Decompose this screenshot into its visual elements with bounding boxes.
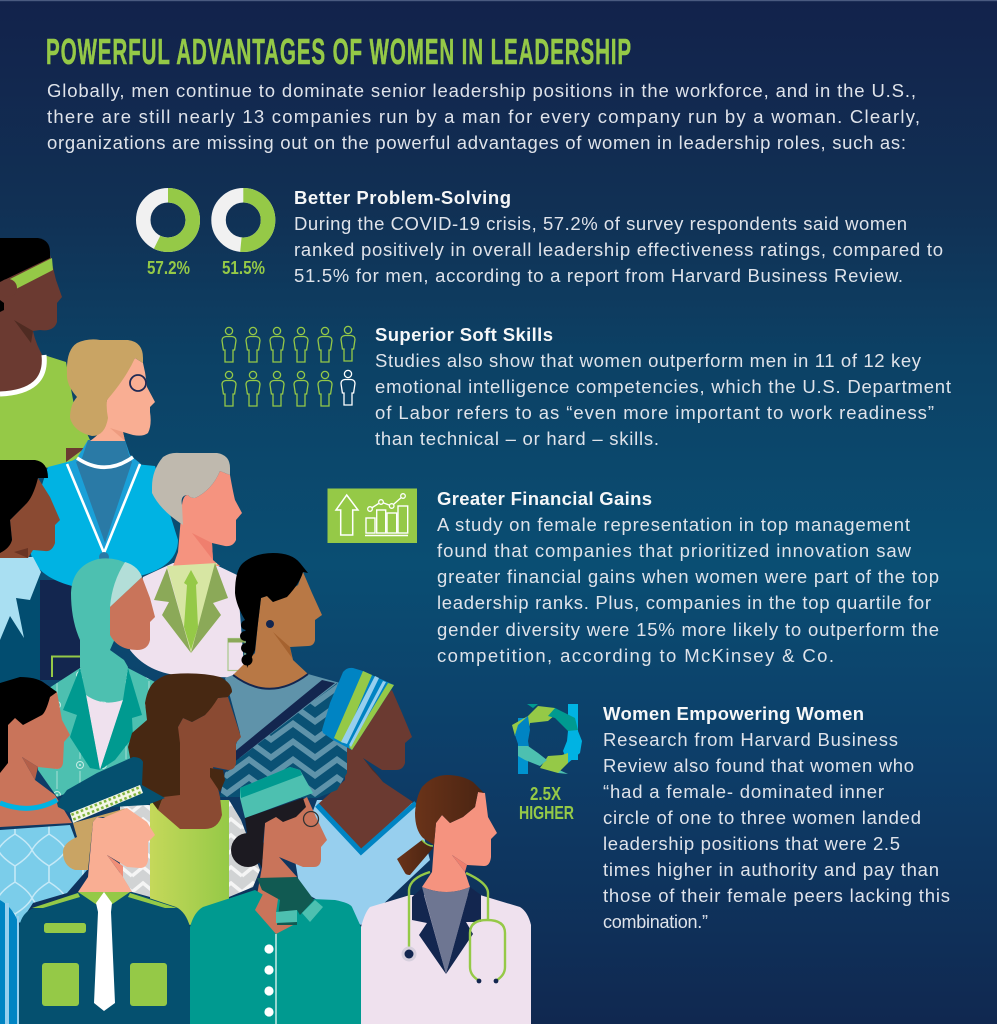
section: superior soft skills: of Labor refers to as “even more important to work readiness” — [375, 402, 934, 423]
figure: woman with black hair and blue necklace — [0, 677, 87, 1024]
figure: woman in teal hat and scarf — [190, 767, 361, 1024]
section: greater financial gains — [437, 488, 939, 666]
icon: donut charts 57.2% and 51.5% — [143, 195, 268, 278]
illustration: group of women — [0, 238, 531, 1024]
figure: blonde woman with glasses and lanyard — [30, 339, 178, 586]
section: greater financial gains: leadership ranks. Plus, companies in the top quartile for — [437, 592, 931, 613]
figure: woman pilot with cap — [19, 757, 190, 1024]
intro text: there are still nearly 13 companies run by a man for every company run by a woman. Clearly, — [47, 106, 920, 127]
section: superior soft skills — [375, 324, 951, 449]
section: women empowering women: leadership positions that were 2.5 — [603, 833, 900, 854]
figure: woman with black hair, left edge — [0, 460, 60, 640]
section: greater financial gains: gender diversity were 15% more likely to outperform the — [437, 619, 939, 640]
figure: doctor with stethoscope — [361, 775, 531, 1024]
icon: donut charts 57.2% and 51.5%: 51.5% — [222, 258, 265, 278]
figure: woman with green headband — [0, 238, 90, 468]
icon: ring of clasped hands: HIGHER — [519, 803, 574, 823]
figure: woman in teal hijab — [38, 558, 157, 797]
icon: twelve people, eleven green and one white — [222, 326, 355, 406]
section: women empowering women: times higher in authority and pay than — [603, 859, 939, 880]
section: superior soft skills: than technical – or hard – skills. — [375, 428, 659, 449]
figure: woman with brown wavy hair and green top — [128, 673, 260, 925]
section: better problem-solving: 51.5% for men, according to a report from Harvard Business Review. — [294, 265, 903, 286]
dark backing panels — [0, 570, 86, 685]
section: greater financial gains: greater financial gains when women were part of the top — [437, 566, 939, 587]
figure: woman with braid — [225, 553, 340, 763]
section: greater financial gains: competition, according to McKinsey & Co. — [437, 645, 834, 666]
section: women empowering women — [603, 703, 950, 932]
section: superior soft skills: Studies also show that women outperform men in 11 of 12 key — [375, 350, 922, 371]
intro text: organizations are missing out on the powerful advantages of women in leadership roles, such as: — [47, 132, 906, 153]
section: greater financial gains: found that companies that prioritized innovation saw — [437, 540, 912, 561]
section: women empowering women: Review also found that women who — [603, 755, 914, 776]
intro text — [47, 80, 920, 153]
section: better problem-solving: ranked positively in overall leadership effectiveness ratings, compared to — [294, 239, 943, 260]
icon: ring of clasped hands — [512, 704, 582, 823]
section: superior soft skills: emotional intelligence competencies, which the U.S. Department — [375, 376, 951, 397]
figure: woman in striped headwrap and blue scrubs — [220, 668, 430, 925]
section: better problem-solving: Better Problem-Solving — [294, 187, 511, 208]
section: women empowering women: Women Empowering Women — [603, 703, 864, 724]
section: women empowering women: Research from Harvard Business — [603, 729, 898, 750]
section: women empowering women: those of their female peers lacking this — [603, 885, 950, 906]
section: women empowering women: circle of one to three women landed — [603, 807, 921, 828]
section: better problem-solving: During the COVID-19 crisis, 57.2% of survey respondents said women — [294, 213, 907, 234]
icon: donut charts 57.2% and 51.5%: 57.2% — [147, 258, 190, 278]
section: women empowering women: combination.” — [603, 912, 708, 932]
icon: ring of clasped hands: 2.5X — [530, 784, 561, 804]
intro text: Globally, men continue to dominate senior leadership positions in the workforce, and in the U.S., — [47, 80, 916, 101]
section: greater financial gains: Greater Financial Gains — [437, 488, 652, 509]
section: women empowering women: “had a female- dominated inner — [603, 781, 884, 802]
section: superior soft skills: Superior Soft Skills — [375, 324, 553, 345]
section: greater financial gains: A study on female representation in top management — [437, 514, 910, 535]
section: better problem-solving — [294, 187, 943, 286]
figure: man with grey hair and suit — [130, 453, 245, 678]
icon: arrow and bar chart — [328, 488, 417, 543]
